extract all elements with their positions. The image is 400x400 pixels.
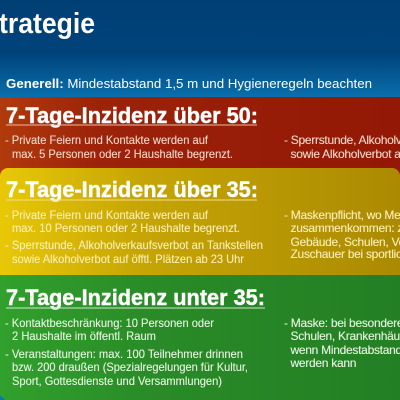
left text: over 35: max. 10 Personen oder 2 Haushalte begrenzt.: [12, 221, 240, 235]
left text: over 50: [5, 133, 233, 161]
right text: under 35: [284, 316, 400, 370]
left text: under 35: - Veranstaltungen: max. 100 Teilnehmer drinnen: [5, 347, 243, 361]
corner accent: [0, 396, 5, 400]
left text: under 35: 2 Haushalte im öffentl. Raum: [12, 329, 156, 343]
panel: incidence over 35: [0, 168, 400, 282]
heading: over 50: 7-Tage-Inzidenz über 50:: [6, 103, 258, 128]
background: blue header: [0, 0, 400, 98]
left text: over 50: - Private Feiern und Kontakte werden auf: [5, 133, 209, 147]
heading: over 35: 7-Tage-Inzidenz über 35:: [6, 177, 258, 202]
panel: incidence over 50: [0, 97, 400, 175]
left text: under 35: - Kontaktbeschränkung: 10 Personen oder: [5, 316, 214, 330]
left text: over 35: - Private Feiern und Kontakte werden auf: [5, 208, 209, 222]
left text: under 35: [5, 316, 248, 388]
right text: over 50: [284, 133, 400, 161]
general rule line: Generell: Mindestabstand 1,5 m und Hygieneregeln beachten: [6, 76, 372, 91]
title: trategie: [0, 8, 95, 40]
left text: over 35: - Sperrstunde, Alkoholverkaufsverbot an Tankstellen: [5, 238, 263, 252]
heading: under 35: 7-Tage-Inzidenz unter 35:: [6, 285, 265, 310]
right text: over 35: [284, 208, 400, 261]
left text: under 35: Sport, Gottesdienste und Versammlungen): [12, 374, 222, 388]
left text: over 35: sowie Alkoholverbot auf öfftl. Plätzen ab 23 Uhr: [12, 252, 244, 266]
panel: incidence under 35: [0, 275, 400, 400]
left text: under 35: bzw. 200 draußen (Spezialregelungen für Kultur,: [12, 360, 248, 374]
left text: over 50: max. 5 Personen oder 2 Haushalte begrenzt.: [12, 147, 233, 161]
right text: under 35: werden kann: [290, 356, 356, 370]
left text: over 35: [5, 208, 263, 266]
